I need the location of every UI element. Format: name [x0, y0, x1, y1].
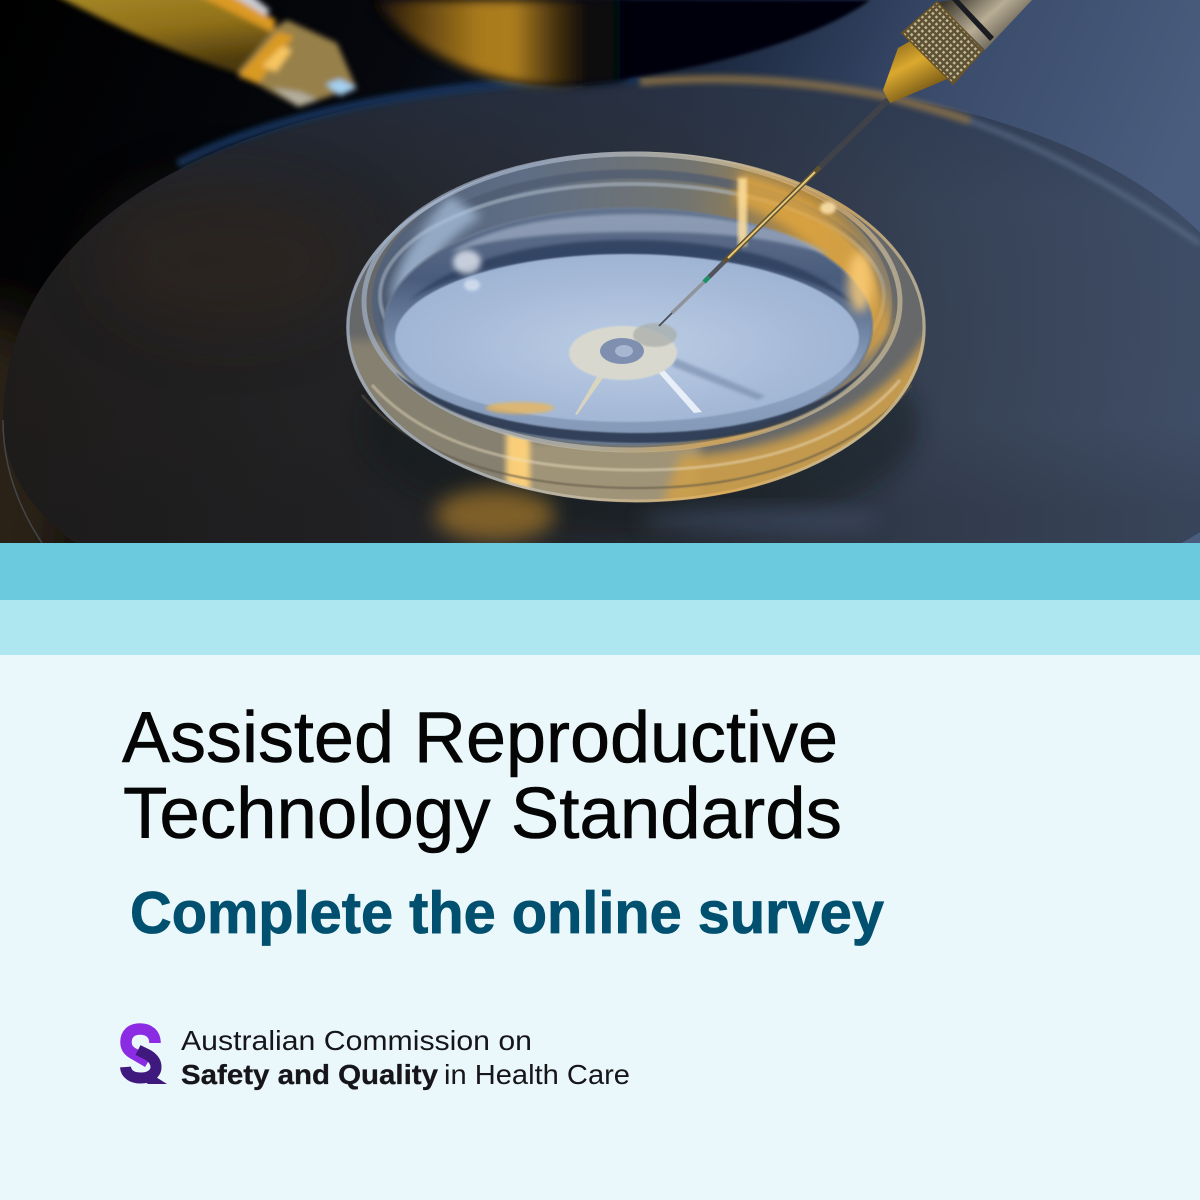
photo backdrop — [0, 0, 1200, 543]
lower side wall left, pale — [346, 337, 508, 480]
petri dish — [340, 152, 930, 510]
gold side reflection upper right — [735, 172, 890, 362]
logo wordmark: Safety and Quality — [181, 1059, 438, 1090]
culture droplet — [569, 323, 677, 380]
gold reflection under dish — [435, 489, 555, 541]
lower side wall gold right — [660, 330, 930, 510]
front lip dark line — [395, 365, 870, 443]
wall ridge lines — [362, 380, 912, 488]
title — [122, 698, 842, 854]
icon: Commission S and Q mark — [126, 1029, 167, 1084]
warm glow on disc at the left — [160, 243, 270, 284]
outer rim line — [348, 153, 924, 501]
inner top wall light band — [450, 214, 830, 255]
flare — [506, 420, 530, 502]
brass holder — [883, 0, 1032, 103]
blue glints — [453, 250, 481, 274]
dish floor — [395, 254, 859, 422]
gold glints — [738, 178, 747, 246]
light teal stripe — [0, 600, 1200, 655]
dark inner edge at the top — [410, 240, 855, 305]
dish shadow — [376, 388, 922, 532]
blue side reflection upper left — [392, 196, 482, 306]
light streaks on floor — [575, 375, 603, 415]
lid rim wall — [372, 152, 892, 452]
gold rim reflection on disc — [640, 79, 1200, 244]
logo wordmark: Australian Commission on — [181, 1025, 532, 1056]
micro-needle — [659, 100, 888, 326]
logo wordmark: in Health Care — [444, 1059, 630, 1090]
warm floor at lower left — [0, 298, 75, 543]
egg cell — [600, 338, 644, 364]
subtitle: Complete the online survey — [130, 880, 884, 946]
logo wordmark — [181, 1025, 630, 1090]
teal stripe — [0, 543, 1200, 600]
microscope objective, out of focus — [372, 0, 870, 85]
dark microscope disc — [2, 76, 1200, 543]
title: Assisted Reproductive — [122, 698, 838, 778]
left brass instrument, out of focus — [50, 0, 357, 107]
inner water well — [384, 208, 872, 444]
upper concentric grooves — [465, 169, 887, 345]
dish body — [346, 152, 926, 502]
photo: petri dish under microscope — [0, 0, 1200, 543]
logo — [126, 1025, 630, 1090]
title: Technology Standards — [123, 774, 842, 854]
lower side wall centre — [526, 441, 705, 502]
